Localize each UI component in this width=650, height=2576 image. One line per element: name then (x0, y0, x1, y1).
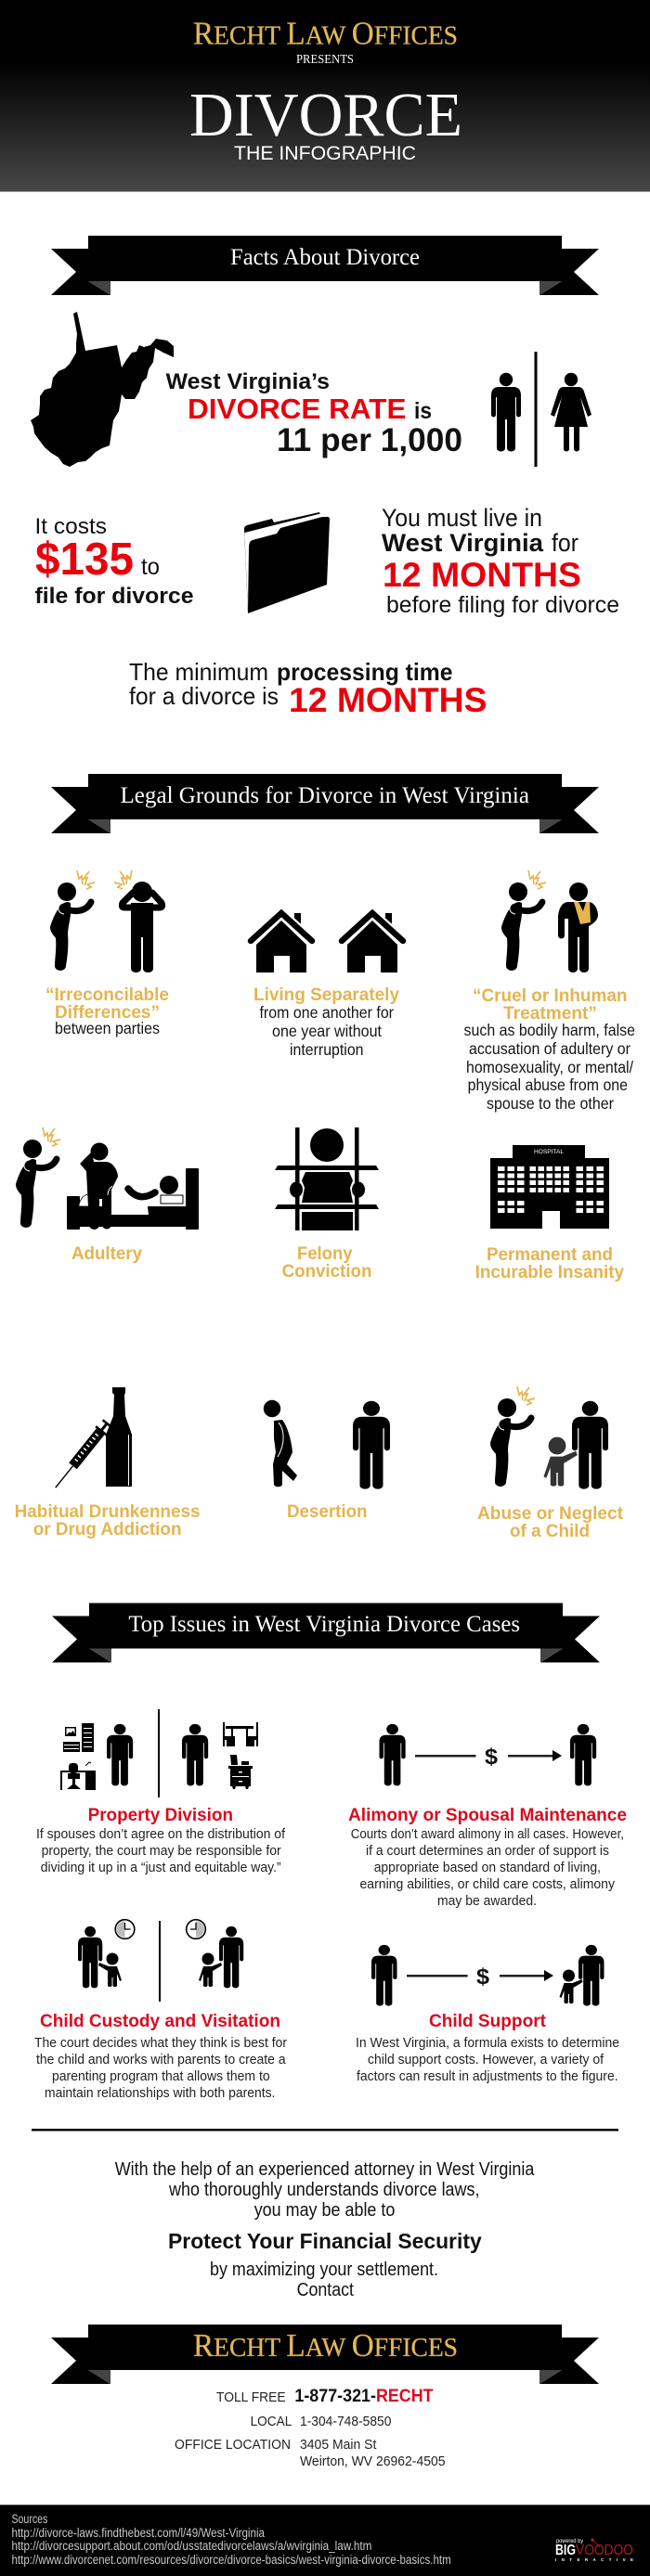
sources: http://www.divorcenet.com/resources/divorce/divorce-basics/west-virginia-divorce-basics.htm (11, 2553, 451, 2567)
ground: living separately (251, 913, 403, 1059)
icon: adultery scene (16, 1127, 199, 1230)
issue: alimony or spousal maintenance: may be awarded. (437, 1894, 537, 1909)
issue: alimony or spousal maintenance: appropriate based on standard of living, (374, 1861, 601, 1875)
closing message: you may be able to (254, 2199, 395, 2221)
ground: abuse or neglect of a child: Abuse or Neglect (477, 1503, 623, 1524)
ground: felony conviction: Conviction (282, 1261, 371, 1282)
ground: desertion: Desertion (287, 1501, 368, 1522)
closing message: who thoroughly understands divorce laws, (168, 2179, 479, 2200)
ground: cruel or inhuman treatment: Treatment” (503, 1003, 597, 1024)
fact: filing cost: file for divorce (35, 584, 194, 609)
contact details: 1-304-748-5850 (300, 2414, 391, 2429)
ground: living separately: interruption (290, 1040, 364, 1059)
ground: adultery: Adultery (72, 1243, 142, 1264)
logo: Big Voodoo Interactive: powered by (556, 2538, 584, 2544)
ground: abuse or neglect of a child (477, 1386, 623, 1541)
ground: cruel or inhuman treatment: spouse to the other (487, 1094, 614, 1113)
ground: felony conviction: Felony (297, 1243, 353, 1264)
fact: residency: 12 MONTHS (383, 556, 581, 594)
ground: cruel or inhuman treatment: “Cruel or Inhuman (473, 985, 628, 1006)
logo: Big Voodoo Interactive: INTERACTIVE (555, 2557, 633, 2562)
divorce rate text: DIVORCE RATE (188, 393, 407, 425)
divorce rate text: West Virginia’s (166, 369, 330, 394)
contact details: LOCAL (251, 2414, 292, 2429)
fact: residency: West Virginia (382, 529, 544, 557)
ground: permanent and incurable insanity: Incurable Insanity (475, 1262, 624, 1282)
issue: property division: Property Division (88, 1805, 233, 1825)
fact: residency: before filing for divorce (386, 592, 619, 618)
issue: child support: factors can result in adjustments to the figure. (357, 2069, 618, 2084)
fact: processing time: for a divorce is (129, 682, 279, 710)
sources: Sources (11, 2512, 47, 2526)
ground: habitual drunkenness or drug addiction: or Drug Addiction (33, 1519, 182, 1539)
ground: felony conviction (275, 1127, 379, 1282)
closing message (115, 2158, 535, 2300)
ground: habitual drunkenness or drug addiction: Habitual Drunkenness (15, 1501, 201, 1522)
closing message: Protect Your Financial Security (168, 2229, 482, 2253)
icon: person walking away (264, 1400, 390, 1489)
closing message: Contact (297, 2279, 354, 2300)
issue: alimony or spousal maintenance: if a court determines an order of support is (366, 1844, 609, 1859)
icon: people dividing furniture (60, 1709, 258, 1797)
ground: permanent and incurable insanity: Permanent and (487, 1244, 613, 1265)
fact: processing time: The minimum (129, 658, 268, 686)
contact banner: Recht Law Offices (51, 2325, 599, 2384)
ground: abuse or neglect of a child: of a Child (510, 1521, 590, 1541)
contact details (175, 2386, 446, 2469)
sources: http://divorce-laws.findthebest.com/l/49/West-Virginia (11, 2526, 265, 2540)
fact: filing cost: to (141, 554, 160, 580)
issue: child support: Child Support (429, 2011, 546, 2031)
fact: processing time (129, 658, 487, 719)
ground: irreconcilable differences: between parties (55, 1019, 160, 1037)
ground: irreconcilable differences: “Irreconcilable (46, 985, 169, 1005)
issue: alimony or spousal maintenance: Alimony or Spousal Maintenance (348, 1805, 627, 1825)
issue: property division: property, the court may be responsible for (42, 1844, 281, 1859)
issue: property division: If spouses don’t agree on the distribution of (36, 1827, 286, 1842)
ground: adultery (16, 1127, 199, 1264)
icon: man and woman (491, 352, 592, 467)
issue: alimony or spousal maintenance: earning abilities, or child care costs, alimony (360, 1877, 616, 1892)
ground: permanent and incurable insanity (475, 1145, 624, 1282)
ground: cruel or inhuman treatment: such as bodily harm, false (464, 1021, 635, 1039)
fact: filing cost: $135 (35, 535, 134, 585)
icon: money transfer between spouses (379, 1724, 596, 1785)
icon: payment to parent and child: $ (476, 1964, 490, 1990)
icon: hospital: HOSPITAL (534, 1149, 564, 1155)
ground: irreconcilable differences (46, 870, 169, 1037)
issue: property division (36, 1709, 286, 1875)
icon: arguing people (50, 870, 162, 972)
icon: person behind bars (275, 1127, 379, 1230)
section banner: legal grounds (51, 774, 599, 833)
section banner: top issues: Top Issues in West Virginia Divorce Cases (128, 1612, 520, 1637)
contact details: 1-877-321- (294, 2386, 376, 2406)
fact: residency: for (552, 529, 578, 557)
title: divorce: DIVORCE (189, 81, 462, 149)
issue: child support: In West Virginia, a formula exists to determine (356, 2036, 619, 2051)
ground: irreconcilable differences: Differences” (55, 1002, 160, 1023)
closing message: by maximizing your settlement. (210, 2259, 438, 2280)
icon: payment to parent and child (371, 1945, 604, 2006)
issue: child custody and visitation (34, 1920, 287, 2101)
icon: aggressor, child and parent (490, 1386, 608, 1489)
ground: cruel or inhuman treatment: accusation of adultery or (469, 1039, 630, 1058)
issue: child support (356, 1945, 619, 2084)
fact: filing cost: It costs (35, 514, 107, 539)
contact details: OFFICE LOCATION (175, 2437, 291, 2453)
fact: processing time: processing time (277, 658, 453, 686)
divorce rate text: 11 per 1,000 (277, 422, 462, 458)
ground: habitual drunkenness or drug addiction (15, 1387, 201, 1539)
icon: shared custody with clocks (78, 1920, 243, 2002)
contact details: Weirton, WV 26962-4505 (300, 2454, 446, 2469)
ground: living separately: Living Separately (254, 985, 399, 1005)
section banner: facts about divorce: Facts About Divorce (230, 245, 420, 270)
section banner: facts about divorce (51, 236, 599, 295)
icon: money transfer between spouses: $ (485, 1745, 499, 1770)
divorce rate text (166, 369, 462, 458)
ground: cruel or inhuman treatment: homosexuality, or mental/ (466, 1058, 633, 1076)
contact details: 3405 Main St (300, 2437, 377, 2453)
header panel (0, 0, 650, 192)
sources (11, 2512, 451, 2567)
issue: child custody and visitation: maintain relationships with both parents. (45, 2086, 275, 2101)
ground: cruel or inhuman treatment: physical abuse from one (468, 1075, 628, 1094)
issue: child custody and visitation: Child Custody and Visitation (40, 2011, 280, 2031)
subtitle: THE INFOGRAPHIC (234, 142, 416, 164)
logo: Big Voodoo Interactive (555, 2538, 633, 2562)
logo: Big Voodoo Interactive: VOODOO (576, 2543, 633, 2558)
fact: residency (382, 504, 619, 618)
closing message: With the help of an experienced attorney in West Virginia (115, 2158, 535, 2180)
icon: aggressor and injured person (501, 870, 598, 972)
issue: property division: dividing it up in a “just and equitable way.” (41, 1861, 281, 1875)
section banner: legal grounds: Legal Grounds for Divorce in West Virginia (121, 783, 529, 808)
icon: bottle and syringe (50, 1387, 132, 1492)
ground: living separately: from one another for (260, 1003, 394, 1022)
issue: alimony or spousal maintenance: Courts don’t award alimony in all cases. However, (351, 1827, 624, 1842)
ground: desertion (264, 1400, 390, 1522)
fact: processing time: 12 MONTHS (289, 681, 487, 719)
ground: cruel or inhuman treatment (464, 870, 635, 1113)
ground: living separately: one year without (272, 1022, 382, 1040)
contact details: RECHT (376, 2386, 434, 2406)
sources: http://divorcesupport.about.com/od/usstatedivorcelaws/a/wvirginia_law.htm (11, 2539, 371, 2553)
contact banner: Recht Law Offices: RECHT LAW OFFICES (193, 2327, 458, 2363)
icon: folder (244, 512, 330, 613)
divorce rate text: is (414, 398, 432, 424)
footer panel (0, 2505, 650, 2576)
issue: alimony or spousal maintenance (348, 1724, 627, 1909)
icon: West Virginia map (31, 312, 174, 467)
icon: two houses (251, 913, 403, 972)
issue: child custody and visitation: parenting program that allows them to (52, 2069, 270, 2084)
presents: PRESENTS (296, 52, 354, 66)
issue: child custody and visitation: The court decides what they think is best for (34, 2036, 287, 2051)
section banner: top issues (52, 1604, 600, 1663)
contact details: TOLL FREE (216, 2389, 286, 2405)
icon: hospital (490, 1145, 609, 1229)
logo: Big Voodoo Interactive: BIG (555, 2543, 576, 2558)
issue: child support: child support costs. However, a variety of (368, 2053, 604, 2067)
header logo: Recht Law Offices: RECHT LAW OFFICES (193, 16, 458, 52)
issue: child custody and visitation: the child and works with parents to create a (36, 2053, 286, 2067)
fact: residency: You must live in (382, 504, 542, 532)
fact: filing cost (35, 514, 194, 609)
